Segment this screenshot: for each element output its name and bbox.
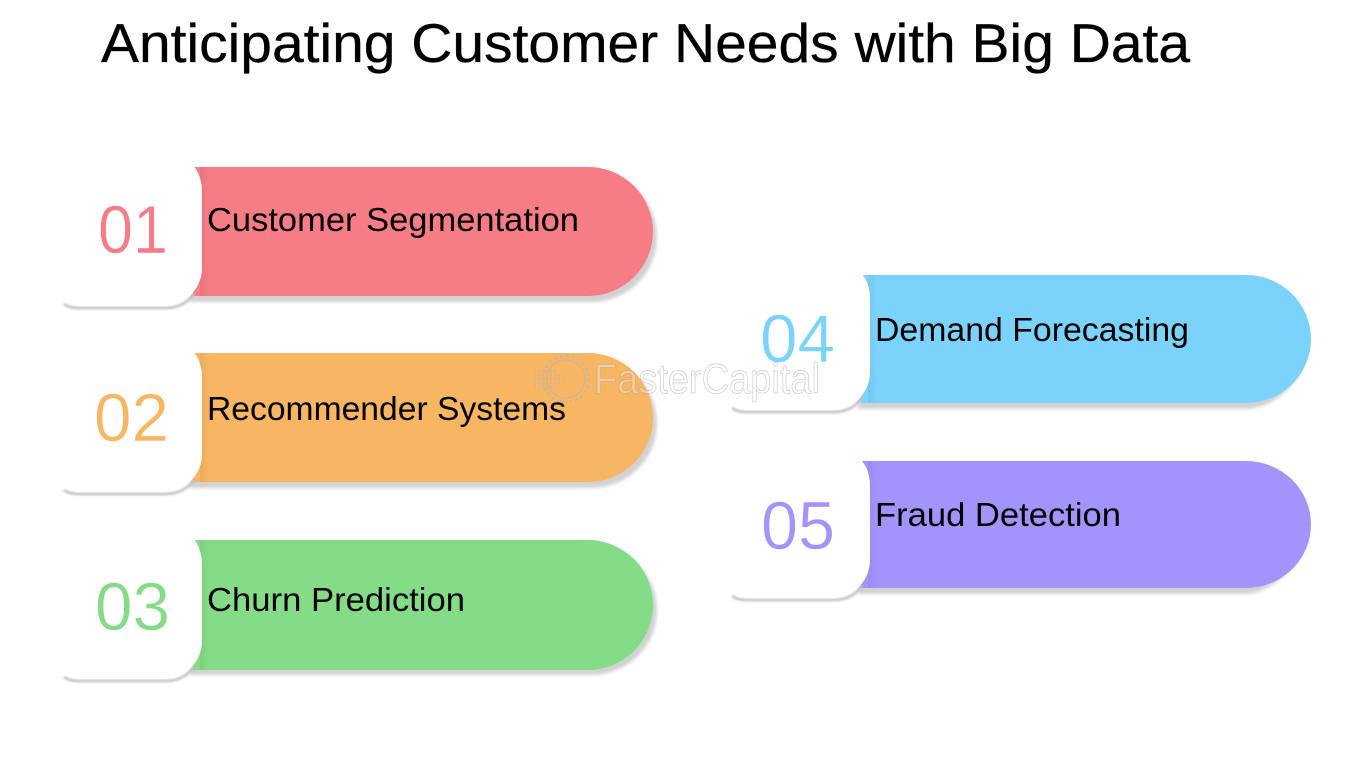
icon: gear with dots xyxy=(534,356,589,402)
number card 01 xyxy=(60,165,202,308)
number 04: 04 xyxy=(760,301,835,377)
number card 02 xyxy=(60,351,202,494)
panel: item 05 fraud detection xyxy=(728,460,1311,600)
label 02: Recommender Systems xyxy=(207,390,566,427)
bar shadow 05 xyxy=(858,466,1303,594)
bar 03 xyxy=(193,540,653,670)
panel: item 04 demand forecasting xyxy=(728,273,1311,412)
number 02: 02 xyxy=(94,380,169,456)
bar 02 xyxy=(193,353,653,482)
number 03: 03 xyxy=(95,569,170,645)
number 01: 01 xyxy=(98,192,168,268)
title: Anticipating Customer Needs with Big Data xyxy=(101,12,1190,74)
number card 03 xyxy=(60,538,202,681)
bar 05 xyxy=(861,461,1311,588)
bar 01 xyxy=(193,167,653,296)
bar shadow 02 xyxy=(190,358,657,488)
bar shadow 03 xyxy=(190,545,657,675)
bar shadow 01 xyxy=(190,172,657,302)
label 05: Fraud Detection xyxy=(875,496,1121,533)
panel: item 02 recommender systems xyxy=(60,351,657,494)
label 01: Customer Segmentation xyxy=(207,201,579,238)
bar shadow 04 xyxy=(858,280,1306,409)
watermark: FasterCapital logo xyxy=(534,355,820,402)
number 05: 05 xyxy=(761,488,835,564)
panel: item 03 churn prediction xyxy=(60,538,657,681)
label 03: Churn Prediction xyxy=(207,581,465,618)
number card 04 xyxy=(728,273,870,412)
bar 04 xyxy=(861,275,1311,403)
panel: item 01 customer segmentation xyxy=(60,165,657,308)
label 04: Demand Forecasting xyxy=(875,311,1189,348)
watermark text: FasterCapital xyxy=(594,355,820,402)
number card 05 xyxy=(728,460,870,600)
